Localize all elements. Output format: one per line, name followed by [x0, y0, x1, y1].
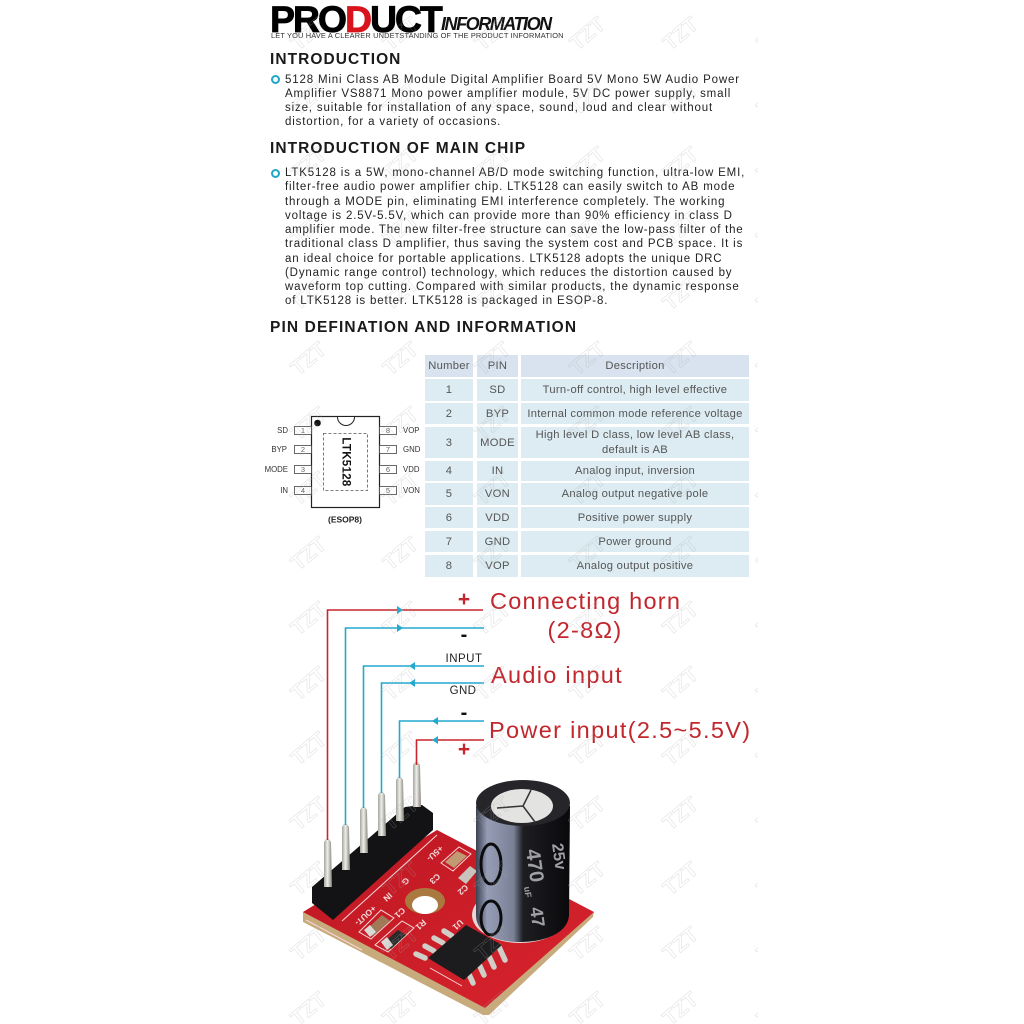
audio input callout: Audio input	[491, 662, 623, 688]
watermarks: TZT	[287, 598, 331, 640]
watermarks: TZT	[753, 598, 797, 640]
pin table: BYP	[486, 408, 509, 420]
pin table: Analog input, inversion	[575, 465, 695, 477]
watermarks: TZT	[287, 533, 331, 575]
pin table: default is AB	[602, 444, 668, 456]
vent lines	[497, 790, 535, 822]
package label: (ESOP8)	[328, 514, 362, 524]
pin table: PIN	[488, 360, 507, 372]
watermarks: TZT	[287, 663, 331, 705]
capacitor markings	[521, 842, 569, 928]
watermarks: TZT	[379, 403, 423, 445]
bullet: introduction	[270, 74, 280, 84]
horn plus: +	[458, 588, 470, 611]
watermarks: TZT	[287, 273, 331, 315]
title: product information	[270, 0, 564, 40]
watermarks: TZT	[659, 338, 703, 380]
watermarks: TZT	[287, 13, 331, 55]
pin numbers: 5	[386, 486, 390, 495]
pin table: 4	[446, 465, 452, 477]
capacitor top face	[491, 789, 553, 823]
watermarks: TZT	[471, 598, 515, 640]
watermarks: TZT	[566, 468, 610, 510]
watermarks: TZT	[566, 793, 610, 835]
watermarks: TZT	[753, 208, 797, 250]
watermarks	[287, 13, 797, 1024]
watermarks: TZT	[287, 468, 331, 510]
input label: INPUT	[446, 653, 482, 665]
pin numbers: 7	[386, 445, 390, 454]
power minus: -	[461, 702, 467, 724]
pin table: Turn-off control, high level effective	[543, 384, 727, 396]
watermarks: TZT	[659, 728, 703, 770]
watermarks: TZT	[753, 468, 797, 510]
watermarks: TZT	[753, 793, 797, 835]
watermarks: TZT	[659, 923, 703, 965]
pcb module photo illustration	[303, 762, 594, 1015]
watermarks: TZT	[471, 403, 515, 445]
watermarks: TZT	[566, 273, 610, 315]
watermarks: TZT	[471, 78, 515, 120]
mounting hole	[405, 888, 445, 914]
pin table: Positive power supply	[578, 512, 692, 524]
watermarks: TZT	[566, 338, 610, 380]
watermarks: TZT	[659, 143, 703, 185]
watermarks: TZT	[659, 533, 703, 575]
right pins	[380, 426, 396, 494]
silkscreen text: C1	[392, 906, 407, 920]
text: main chip body: an ideal choice for portable applications. LTK5128 adopts the unique DRC	[285, 252, 722, 264]
chip pinout diagram	[265, 416, 421, 524]
watermarks: TZT	[287, 143, 331, 185]
silkscreen text: +OUT-	[353, 904, 378, 928]
watermarks: TZT	[379, 13, 423, 55]
watermarks: TZT	[379, 533, 423, 575]
pin table: 2	[446, 408, 452, 420]
silkscreen text	[353, 844, 470, 932]
watermarks: TZT	[287, 858, 331, 900]
amplifier ic	[428, 925, 502, 980]
title word: INFORMATION: INFORMATION	[441, 14, 551, 34]
watermarks: TZT	[753, 923, 797, 965]
watermarks: TZT	[287, 923, 331, 965]
watermarks: TZT	[471, 858, 515, 900]
horn minus: -	[461, 624, 467, 646]
text: main chip body	[285, 167, 745, 307]
watermarks: TZT	[471, 663, 515, 705]
pin table: IN	[492, 465, 503, 477]
pin table: Power ground	[598, 536, 672, 548]
pin table: 1	[446, 384, 452, 396]
notch	[338, 417, 354, 426]
text: main chip body: waveform top cutting. Compared with similar products, the dynamic response	[285, 281, 740, 293]
silkscreen text: R1	[413, 918, 428, 932]
watermarks: TZT	[566, 858, 610, 900]
power plus wire	[416, 740, 484, 765]
watermarks: TZT	[379, 143, 423, 185]
watermarks: TZT	[471, 728, 515, 770]
watermarks: TZT	[379, 923, 423, 965]
audio input wire	[364, 666, 484, 808]
watermarks: TZT	[753, 273, 797, 315]
pin numbers: 3	[301, 465, 305, 474]
silkscreen lines	[306, 835, 462, 986]
watermarks: TZT	[379, 208, 423, 250]
watermarks: TZT	[471, 13, 515, 55]
watermarks: TZT	[753, 338, 797, 380]
pin table: Internal common mode reference voltage	[527, 408, 743, 420]
watermarks: TZT	[287, 793, 331, 835]
text: main chip body: through a MODE pin, eliminating EMI interference completely. The working	[285, 196, 725, 208]
watermarks: TZT	[566, 728, 610, 770]
watermarks: TZT	[379, 858, 423, 900]
capacitor sleeve	[476, 806, 570, 942]
pin table: Analog output positive	[577, 560, 693, 572]
polarity mark lower	[481, 901, 501, 935]
text: main chip body: (Dynamic range control) technology, which reduces the distortion caused by	[285, 267, 732, 279]
watermarks: TZT	[379, 78, 423, 120]
watermarks: TZT	[379, 598, 423, 640]
left pin names: SD	[277, 426, 288, 435]
pin table: 5	[446, 488, 452, 500]
pin numbers	[301, 426, 390, 495]
right pin names: VDD	[403, 465, 420, 474]
watermarks: TZT	[659, 403, 703, 445]
watermarks: TZT	[753, 143, 797, 185]
watermarks: TZT	[471, 793, 515, 835]
power plus: +	[458, 738, 470, 761]
connecting horn callout: Connecting horn	[490, 588, 681, 614]
impedance callout: (2-8Ω)	[548, 617, 622, 643]
silkscreen text: IN	[381, 891, 394, 904]
pin numbers: 1	[301, 426, 305, 435]
pin table: 6	[446, 512, 452, 524]
text: introduction body: 5128 Mini Class AB Module Digital Amplifier Board 5V Mono 5W Audio Power	[285, 74, 740, 86]
speaker minus wire	[346, 628, 484, 825]
capacitor base ring	[472, 887, 568, 943]
watermarks: TZT	[379, 728, 423, 770]
watermarks: TZT	[471, 143, 515, 185]
resistor R1	[375, 921, 414, 952]
watermarks: TZT	[287, 78, 331, 120]
capacitor markings: 470	[521, 848, 547, 884]
watermarks: TZT	[566, 13, 610, 55]
left pin names: IN	[280, 486, 288, 495]
pin table: High level D class, low level AB class,	[536, 429, 734, 441]
silkscreen text: +5U-	[425, 844, 445, 864]
wiring labels	[446, 588, 751, 761]
arrows	[397, 606, 438, 744]
watermarks: TZT	[379, 663, 423, 705]
capacitor markings: 25v	[548, 842, 569, 871]
left pin names: BYP	[271, 445, 287, 454]
pin table: GND	[485, 536, 510, 548]
watermarks: TZT	[659, 793, 703, 835]
right pin names: VOP	[403, 426, 419, 435]
chip body	[312, 416, 380, 508]
watermarks: TZT	[659, 663, 703, 705]
watermarks: TZT	[566, 923, 610, 965]
silkscreen text: U1	[450, 918, 465, 932]
mounting hole centre	[412, 896, 438, 914]
heading: introduction: INTRODUCTION	[270, 50, 401, 68]
watermarks: TZT	[659, 208, 703, 250]
pin table: 3	[446, 436, 452, 448]
watermarks: TZT	[471, 208, 515, 250]
watermarks: TZT	[471, 923, 515, 965]
watermarks: TZT	[287, 403, 331, 445]
left pin names: MODE	[265, 465, 288, 474]
watermarks: TZT	[379, 273, 423, 315]
watermarks: TZT	[471, 338, 515, 380]
pin table: Number	[428, 360, 470, 372]
ic pads	[416, 931, 505, 983]
watermarks: TZT	[753, 663, 797, 705]
left pin names	[265, 426, 288, 495]
watermarks: TZT	[566, 533, 610, 575]
pin table: 8	[446, 560, 452, 572]
watermarks: TZT	[659, 273, 703, 315]
pin header	[312, 805, 433, 920]
capacitor C1	[359, 910, 394, 939]
watermarks: TZT	[659, 78, 703, 120]
subtitle: LET YOU HAVE A CLEARER UNDETSTANDING OF THE PRODUCT INFORMATION	[271, 31, 564, 40]
polarity mark upper	[481, 844, 501, 884]
power minus wire	[400, 721, 484, 778]
watermarks: TZT	[753, 858, 797, 900]
watermarks: TZT	[287, 208, 331, 250]
watermarks: TZT	[753, 13, 797, 55]
capacitor C2	[458, 866, 477, 884]
chip label: LTK5128	[340, 437, 352, 487]
watermarks: TZT	[287, 338, 331, 380]
pin numbers: 8	[386, 426, 390, 435]
watermarks: TZT	[753, 728, 797, 770]
watermarks: TZT	[566, 208, 610, 250]
board top	[303, 830, 594, 1008]
capacitor top rim	[476, 780, 570, 826]
watermarks: TZT	[753, 78, 797, 120]
text: introduction body: size, suitable for installation of any space, sound, loud and clear without	[285, 102, 713, 114]
watermarks: TZT	[566, 403, 610, 445]
watermarks: TZT	[566, 663, 610, 705]
gnd label: GND	[450, 685, 476, 697]
watermarks: TZT	[566, 598, 610, 640]
text: main chip body: of LTK5128 is better. LTK5128 is packaged in ESOP-8.	[285, 295, 608, 307]
pin 1 dot	[314, 420, 321, 426]
text: introduction body	[285, 74, 740, 128]
heading: pin defination: PIN DEFINATION AND INFORMATION	[270, 318, 577, 336]
header pins	[324, 762, 421, 887]
text: main chip body: traditional class D amplifier, thus saving the system cost and PCB space. It is	[285, 238, 743, 250]
watermarks: TZT	[753, 403, 797, 445]
silkscreen text: C3	[427, 872, 442, 886]
left pins	[294, 426, 312, 494]
pin numbers: 6	[386, 465, 390, 474]
pin table: Description	[605, 360, 665, 372]
watermarks: TZT	[471, 273, 515, 315]
pin table: 7	[446, 536, 452, 548]
watermarks: TZT	[566, 143, 610, 185]
watermarks: TZT	[659, 598, 703, 640]
text: main chip body: LTK5128 is a 5W, mono-channel AB/D mode switching function, ultra-low EMI,	[285, 167, 745, 179]
heading: introduction of main chip: INTRODUCTION OF MAIN CHIP	[270, 140, 526, 157]
text: introduction body: distortion, for a variety of occasions.	[285, 116, 501, 128]
capacitor markings: 47	[526, 906, 549, 928]
watermarks: TZT	[471, 533, 515, 575]
watermarks: TZT	[659, 13, 703, 55]
watermarks: TZT	[379, 468, 423, 510]
audio ground wire	[382, 683, 484, 793]
pin table: VOP	[485, 560, 510, 572]
watermarks: TZT	[471, 468, 515, 510]
watermarks: TZT	[379, 793, 423, 835]
watermarks: TZT	[659, 858, 703, 900]
wiring diagram	[328, 606, 484, 840]
right pin names: GND	[403, 445, 421, 454]
right pin names: VON	[403, 486, 420, 495]
bullet: main chip	[270, 168, 280, 178]
pin numbers: 2	[301, 445, 305, 454]
pin table: VON	[485, 488, 510, 500]
dashed die pad	[324, 434, 368, 490]
text: main chip body: voltage is 2.5V-5.5V, which can provide more than 90% efficiency in class D	[285, 210, 733, 222]
pin numbers: 4	[301, 486, 305, 495]
power input callout: Power input(2.5~5.5V)	[489, 717, 751, 743]
watermarks: TZT	[753, 533, 797, 575]
pin table	[425, 355, 749, 577]
speaker plus wire	[328, 610, 483, 840]
pin table: SD	[489, 384, 506, 396]
text: main chip body: amplifier mode. The new filter-free structure can save the low-pass filter of the	[285, 224, 743, 236]
pin table: Analog output negative pole	[562, 488, 708, 500]
watermarks: TZT	[659, 468, 703, 510]
text: main chip body: filter-free audio power amplifier chip. LTK5128 can easily switch to AB mode	[285, 181, 735, 193]
pin table: VDD	[485, 512, 510, 524]
pin table: MODE	[480, 436, 515, 448]
watermarks: TZT	[287, 728, 331, 770]
capacitor	[472, 780, 570, 943]
capacitor C3	[441, 847, 471, 871]
watermarks: TZT	[379, 338, 423, 380]
board edge	[303, 912, 594, 1015]
silkscreen text: C2	[455, 883, 470, 897]
right pin names	[403, 426, 421, 495]
watermarks: TZT	[566, 78, 610, 120]
text: introduction body: Amplifier VS8871 Mono power amplifier module, 5V DC power supply, small	[285, 88, 731, 100]
capacitor markings: uF	[522, 886, 534, 899]
silkscreen text: G	[399, 876, 411, 888]
